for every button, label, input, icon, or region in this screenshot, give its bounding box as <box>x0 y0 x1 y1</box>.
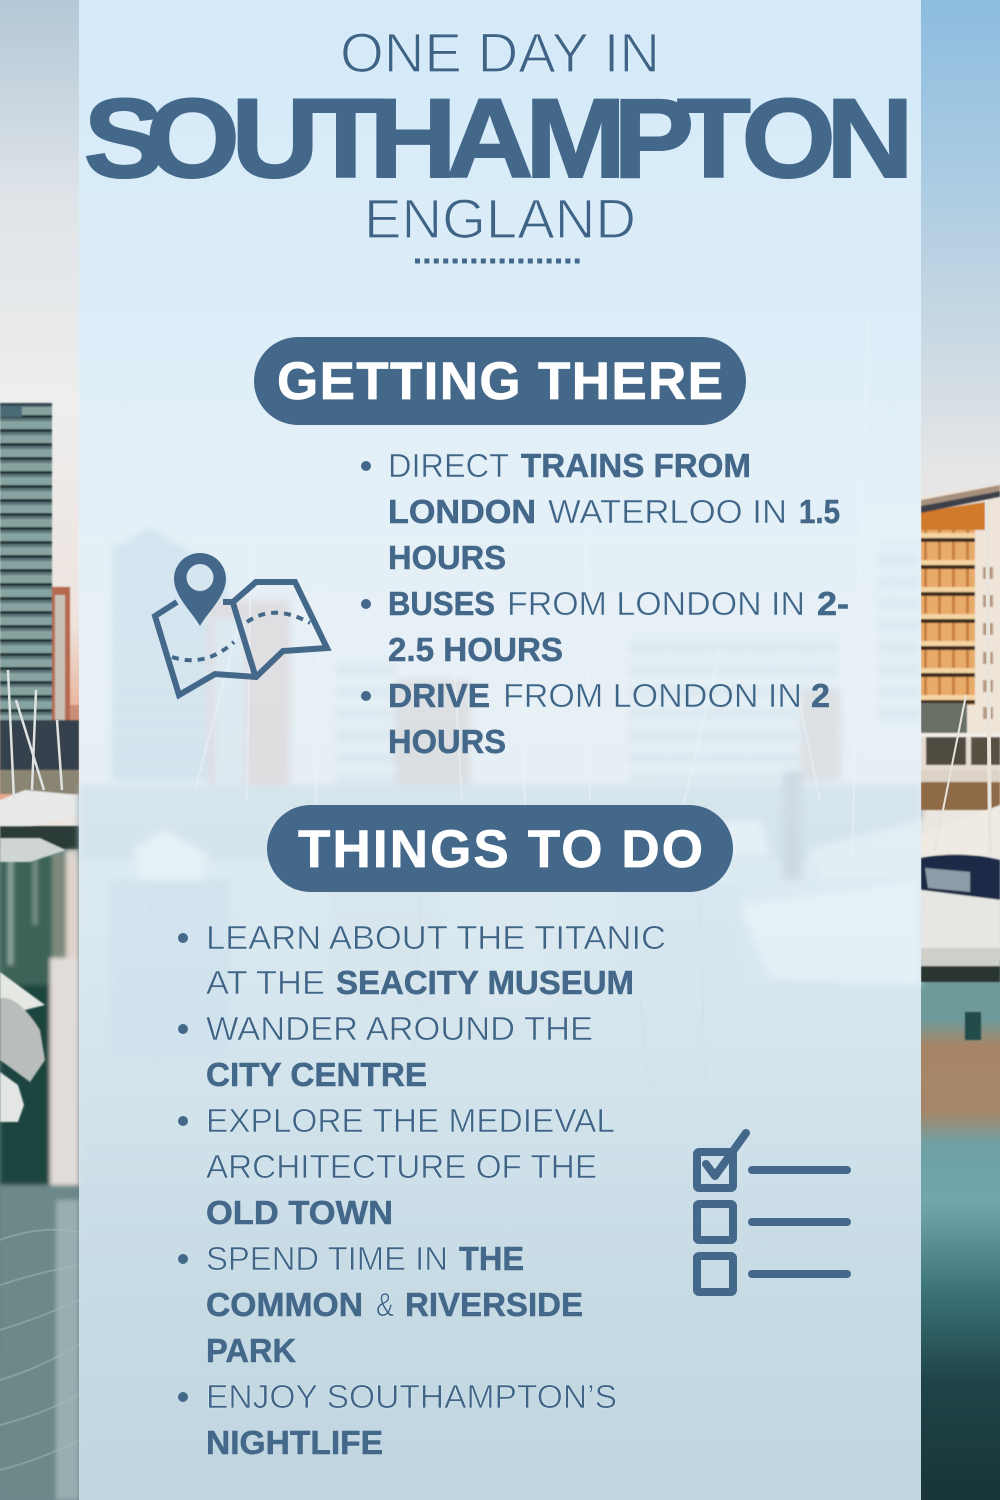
text block: getting there list: 2- <box>817 585 849 622</box>
text block: getting there list: FROM LONDON IN <box>507 585 805 622</box>
text block: getting there list <box>361 447 849 760</box>
title: Southampton: SOUTHAMPTON <box>84 75 914 201</box>
text block: things to do list: PARK <box>206 1332 296 1369</box>
heading pill: getting there: GETTING THERE <box>277 352 723 411</box>
text block: things to do list: CITY CENTRE <box>206 1056 427 1093</box>
text block: things to do list: COMMON <box>206 1286 363 1323</box>
heading pill: things to do <box>267 805 733 892</box>
ghost buildings seen through the panel <box>79 510 921 1060</box>
text block: getting there list: FROM LONDON IN <box>503 677 802 714</box>
text block: getting there list: 1.5 <box>799 493 840 530</box>
title: one day in: ONE DAY IN <box>340 21 660 84</box>
text block: things to do list: SEACITY MUSEUM <box>336 964 634 1001</box>
text block: things to do list: & <box>376 1286 394 1323</box>
heading pill: things to do: THINGS TO DO <box>298 820 703 879</box>
text block: getting there list: BUSES <box>388 585 495 622</box>
heading pill: getting there <box>254 337 746 425</box>
text block: getting there list: TRAINS FROM <box>521 447 751 484</box>
title block <box>84 21 914 250</box>
text block: things to do list: ENJOY SOUTHAMPTON’S <box>206 1378 617 1415</box>
text block: getting there list: DIRECT <box>388 447 509 484</box>
text block: things to do list: LEARN ABOUT THE TITANIC <box>206 919 666 956</box>
text block: getting there list: LONDON <box>388 493 536 530</box>
text block: things to do list: EXPLORE THE MEDIEVAL <box>206 1102 615 1139</box>
text block: things to do list <box>178 919 666 1461</box>
left strip: tower, boats, water <box>0 403 79 850</box>
text block: things to do list: SPEND TIME IN <box>206 1240 448 1277</box>
text block: getting there list: 2 <box>811 677 830 714</box>
text block: things to do list: THE <box>459 1240 524 1277</box>
icon: map with location pin <box>155 553 327 695</box>
text block: things to do list: NIGHTLIFE <box>206 1424 383 1461</box>
title: England: ENGLAND <box>364 187 636 250</box>
text block: things to do list: ARCHITECTURE OF THE <box>206 1148 597 1185</box>
text block: getting there list: HOURS <box>388 723 506 760</box>
text block: things to do list: WANDER AROUND THE <box>206 1010 593 1047</box>
text block: getting there list: DRIVE <box>388 677 490 714</box>
text block: getting there list: HOURS <box>388 539 506 576</box>
right strip: apartment building, boats, water <box>921 484 1000 1040</box>
text block: getting there list: 2.5 HOURS <box>388 631 563 668</box>
icon: checklist <box>697 1133 847 1292</box>
text block: getting there list: WATERLOO IN <box>548 493 787 530</box>
text block: things to do list: RIVERSIDE <box>405 1286 583 1323</box>
text block: things to do list: OLD TOWN <box>206 1194 393 1231</box>
text block: things to do list: AT THE <box>206 964 325 1001</box>
